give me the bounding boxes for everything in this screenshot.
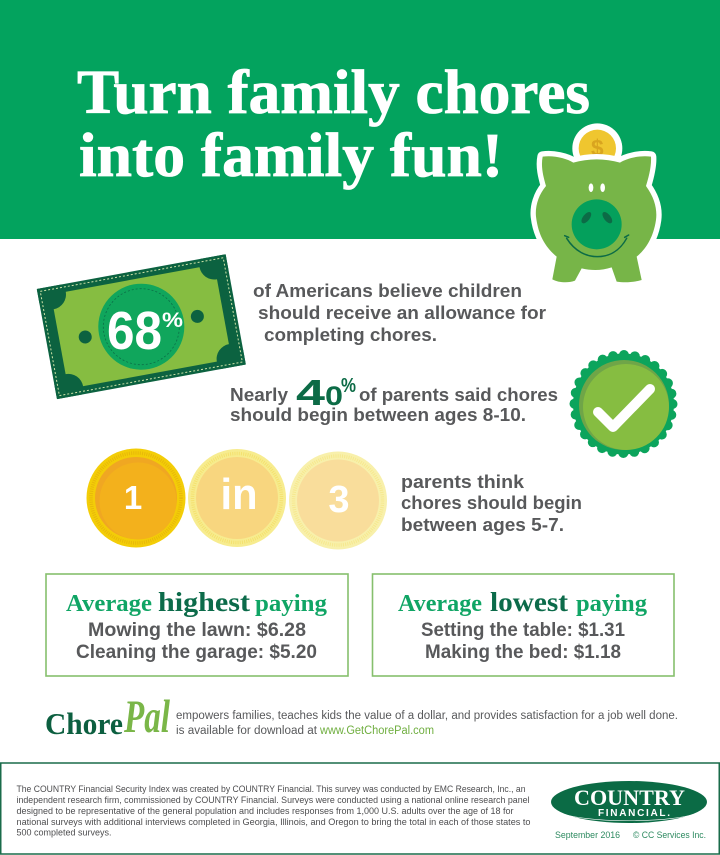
text: 1 in 3 statement: between ages 5-7. <box>401 514 564 535</box>
text: date and copyright: September 2016 <box>555 830 620 841</box>
heading: average lowest paying: lowest <box>490 587 568 617</box>
text: 1 in 3 statement <box>401 471 582 535</box>
text: ChorePal description: www.GetChorePal.com <box>319 725 434 737</box>
heading: average highest paying: Average <box>66 591 152 617</box>
list: lowest chores <box>421 619 625 663</box>
text: 1 in 3 statement: chores should begin <box>401 492 582 513</box>
icon: coin with 3: 3 <box>328 479 350 521</box>
text: 40 percent statement: 0 <box>325 381 343 411</box>
list: lowest chores: Setting the table: $1.31 <box>421 619 625 641</box>
text: survey methodology: national surveys with additional interviews completed in Georgia, Illinois, and Oregon to bring the total in each of those states to <box>16 817 530 828</box>
heading: average lowest paying <box>398 587 647 617</box>
text: 68 percent statement: completing chores. <box>264 324 437 345</box>
panel: lowest paying <box>372 574 674 676</box>
text: date and copyright: © CC Services Inc. <box>633 830 706 841</box>
header band <box>0 0 720 239</box>
logo: ChorePal: Pal <box>123 691 170 743</box>
panel: highest paying <box>46 574 348 676</box>
text: survey methodology: designed to be representative of the general population and includes responses from 1,000 U.S. adults over the age of 18 for <box>16 806 514 817</box>
icon: piggy bank with coin <box>536 123 656 282</box>
logo: ChorePal <box>45 691 170 743</box>
text: 40 percent statement: Nearly <box>230 384 289 405</box>
text: 68 percent statement: should receive an allowance for <box>258 302 546 323</box>
text: 40 percent statement: of parents said chores <box>359 384 558 405</box>
list: highest chores: Cleaning the garage: $5.20 <box>76 641 317 663</box>
footer frame <box>1 763 719 854</box>
text: survey methodology: The COUNTRY Financial Security Index was created by COUNTRY Financial. This survey was conducted by EMC Research, Inc., an <box>16 784 526 795</box>
icon: coin with in: in <box>220 470 258 519</box>
icon: coin with 1 <box>86 448 186 548</box>
text: survey methodology <box>16 784 530 838</box>
68 percent figure: 68 <box>107 301 162 361</box>
title: Turn family chores <box>77 59 590 127</box>
icon: piggy bank with coin: $ <box>591 135 604 161</box>
68 percent figure: % <box>162 309 183 332</box>
list: highest chores <box>76 619 317 663</box>
text: 40 percent statement <box>230 372 558 425</box>
heading: average highest paying: paying <box>255 591 327 617</box>
text: ChorePal description: is available for download at <box>176 725 318 737</box>
logo: ChorePal: Chore <box>45 706 123 741</box>
icon: check mark badge <box>573 354 674 454</box>
text: 1 in 3 statement: parents think <box>401 471 525 492</box>
text: ChorePal description: empowers families, teaches kids the value of a dollar, and provides satisfaction for a job well done. <box>176 710 678 722</box>
icon: coin with 1: 1 <box>124 479 142 516</box>
list: lowest chores: Making the bed: $1.18 <box>425 641 621 663</box>
icon: dollar bill 68% <box>36 254 246 400</box>
text: 68 percent statement: of Americans believe children <box>253 280 522 301</box>
logo: COUNTRY Financial <box>551 781 707 823</box>
heading: average lowest paying: paying <box>576 591 647 617</box>
heading: average highest paying: highest <box>158 587 250 617</box>
text: survey methodology: independent research firm, commissioned by COUNTRY Financial. Surveys were conducted using a national online research panel <box>16 795 530 806</box>
text: 40 percent statement: should begin between ages 8-10. <box>230 404 526 425</box>
text: date and copyright <box>555 830 706 841</box>
text: 68 percent statement <box>253 280 546 345</box>
logo: COUNTRY Financial: COUNTRY <box>574 785 685 810</box>
heading: average highest paying <box>66 587 327 617</box>
text: ChorePal description <box>176 710 678 737</box>
title: into family fun! <box>79 122 503 190</box>
icon: coin with 3 <box>289 452 387 550</box>
text: survey methodology: 500 completed surveys. <box>16 828 112 838</box>
list: highest chores: Mowing the lawn: $6.28 <box>88 619 306 641</box>
icon: coin with in <box>188 449 286 547</box>
logo: COUNTRY Financial: FINANCIAL. <box>598 808 670 819</box>
text: 40 percent statement: % <box>341 375 356 397</box>
title <box>77 59 590 190</box>
heading: average lowest paying: Average <box>398 591 482 617</box>
text: 40 percent statement: 4 <box>296 372 325 413</box>
